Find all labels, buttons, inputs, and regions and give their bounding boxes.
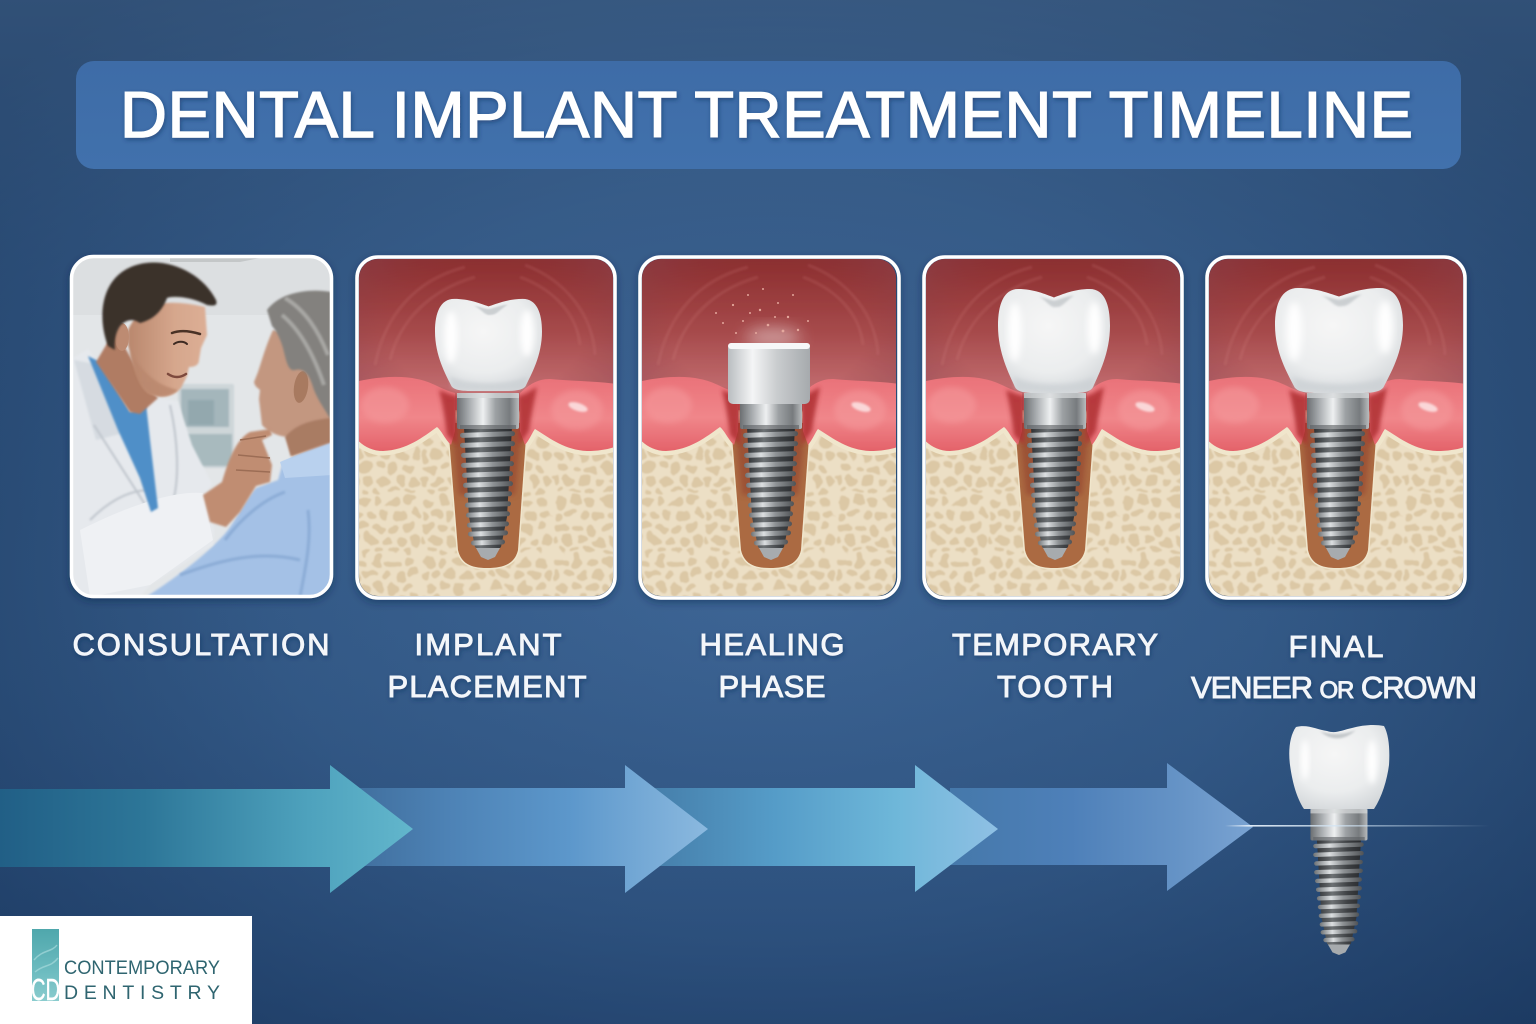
label: consultation: CONSULTATION <box>72 627 330 662</box>
crown <box>435 299 542 391</box>
doctor hair <box>102 262 217 350</box>
label: temporary tooth <box>952 627 1158 704</box>
panel: final crown <box>1191 255 1481 614</box>
arrow 4 <box>950 763 1253 891</box>
label: implant placement <box>388 627 587 704</box>
standalone implant with crown <box>1289 725 1389 955</box>
logo text: CONTEMPORARY <box>64 957 220 979</box>
logo <box>0 916 252 1024</box>
patient shirt <box>148 466 330 595</box>
crown <box>1289 725 1389 809</box>
label: implant placement: PLACEMENT <box>388 669 587 704</box>
label: temporary tooth: TEMPORARY <box>952 627 1158 662</box>
arrow 3 <box>655 765 998 892</box>
arrow guide line <box>1225 825 1490 827</box>
crown <box>1275 288 1403 393</box>
title banner <box>76 61 1461 169</box>
crown <box>998 289 1110 393</box>
doctor coat <box>177 402 204 469</box>
arrow 1 <box>0 765 413 893</box>
logo mark <box>31 929 60 1007</box>
doctor face <box>128 303 207 396</box>
panel: healing phase <box>624 255 914 614</box>
doctor eye, brow, mouth <box>168 331 200 377</box>
patient neck and face <box>254 330 331 456</box>
healing cap <box>728 343 810 404</box>
panel: temporary tooth <box>908 255 1198 614</box>
logo mark: CD <box>31 972 60 1007</box>
label: final veneer or crown <box>1191 629 1477 705</box>
doctor neck <box>96 330 158 414</box>
arrow 2 <box>360 765 708 893</box>
label: implant placement: IMPLANT <box>414 627 562 662</box>
title: DENTAL IMPLANT TREATMENT TIMELINE <box>120 78 1413 151</box>
healing sparkle <box>715 288 809 347</box>
label: final veneer or crown: VENEER OR CROWN <box>1191 670 1477 705</box>
patient hair <box>267 291 331 420</box>
label: healing phase: PHASE <box>718 669 826 704</box>
logo text <box>64 957 220 1004</box>
logo text: DENTISTRY <box>64 982 220 1004</box>
step labels <box>72 627 1477 705</box>
label: temporary tooth: TOOTH <box>997 669 1113 704</box>
timeline arrows <box>0 763 1253 893</box>
label: healing phase: HEALING <box>700 627 844 662</box>
implant screw <box>1310 809 1367 955</box>
panel: consultation photo <box>70 255 333 600</box>
doctor scrubs <box>88 356 158 512</box>
panel: implant placement <box>341 255 631 614</box>
doctor hand <box>203 429 272 527</box>
label: final veneer or crown: FINAL <box>1288 629 1384 664</box>
label: healing phase <box>700 627 844 704</box>
background monitor <box>178 384 234 468</box>
